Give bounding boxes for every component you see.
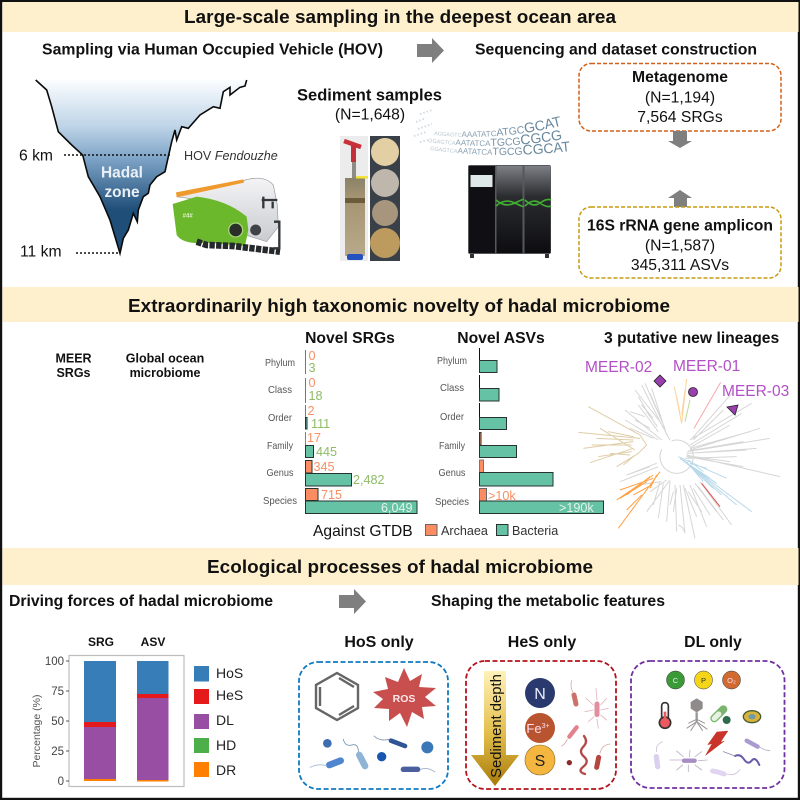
icon: oxygen [722, 671, 740, 689]
icon: lightning [705, 731, 728, 756]
marker: MEER-01 circle [688, 388, 698, 396]
subheading: driving forces: Driving forces of hadal microbiome [9, 593, 273, 610]
label: MEER SRGs: SRGs [56, 366, 91, 380]
icon: ROS burst [373, 668, 436, 727]
heading: HoS only: HoS only [344, 634, 414, 651]
icon: nitrogen: N [534, 686, 546, 703]
bar chart: novel SRGs: Genus [266, 467, 294, 479]
bar chart: novel ASVs: Genus [438, 467, 466, 479]
heading: HeS only: HeS only [508, 634, 576, 651]
arrow: driving to metabolic [339, 589, 366, 614]
illustration: submersible: #4# [183, 213, 193, 219]
arrow: metagenome down [668, 131, 692, 148]
bar chart: novel SRGs: 345 [314, 460, 335, 474]
box: HeS only [466, 661, 616, 789]
stacked bar chart: percentage [31, 635, 184, 788]
bar chart: novel SRGs: Class [268, 384, 292, 396]
label: MEER SRGs [55, 352, 92, 380]
graphic: DNA sequence reads [414, 109, 570, 156]
section heading band: ecological: Ecological processes of hadal microbiome [207, 557, 593, 578]
box: 16S rRNA amplicon: 345,311 ASVs [631, 257, 729, 274]
bar chart: novel SRGs: 111 [311, 417, 330, 431]
icon: carbon: C [673, 676, 679, 685]
stacked bar chart: percentage: SRG [88, 635, 114, 649]
icons: bacteria [562, 681, 610, 774]
bar chart: novel SRGs: 0 [308, 349, 316, 363]
legend: driving forces: HD [216, 737, 236, 753]
bar chart: novel ASVs [435, 330, 604, 515]
legend: against GTDB: Bacteria [512, 524, 558, 538]
legend: against GTDB [313, 523, 558, 540]
bar chart: novel SRGs [263, 330, 417, 515]
diagram: hadal trench: zone [104, 184, 140, 201]
box: metagenome [579, 64, 781, 131]
icon: phosphorus: P [701, 676, 706, 685]
bar chart: novel SRGs: 18 [308, 389, 323, 403]
phylogenetic tree [578, 379, 780, 538]
bar chart: novel ASVs: Novel ASVs [457, 330, 545, 347]
label: global ocean microbiome: Global ocean [126, 352, 204, 366]
icon: iron: 3+ [542, 723, 550, 730]
marker: MEER-03 triangle [727, 405, 738, 415]
diagram: hadal trench: 11 km [20, 244, 62, 260]
stacked bar chart: percentage: 50 [51, 716, 64, 728]
bar chart: novel SRGs: 2 [308, 404, 315, 418]
label: HOV Fendouzhe: HOV Fendouzhe [184, 149, 278, 163]
panel: taxonomic novelty [2, 287, 798, 540]
icon: sediment depth arrow [471, 671, 519, 786]
icon: phosphorus [694, 671, 712, 689]
bar chart: novel ASVs: Class [440, 382, 464, 394]
icon: phage [687, 698, 707, 731]
legend: driving forces: DL [216, 712, 234, 728]
bar chart: novel SRGs: 2,482 [353, 473, 385, 487]
photo: sediment core [340, 136, 368, 261]
stacked bar chart: percentage: 25 [51, 746, 64, 758]
icon: iron [525, 713, 555, 743]
bar chart: novel SRGs: 3 [308, 361, 316, 375]
icons: bacteria [310, 736, 435, 772]
arrow: sampling to sequencing [417, 38, 444, 63]
bar chart: novel SRGs: Family [267, 440, 294, 452]
bar chart: novel ASVs: Species [435, 496, 469, 508]
section heading band: ecological [2, 548, 798, 585]
icon: iron: Fe [526, 721, 542, 736]
section heading band: novelty [2, 287, 798, 322]
heading: sediment samples: Sediment samples [297, 86, 442, 104]
box: HoS only [299, 662, 448, 789]
bar chart: novel SRGs: 0 [308, 376, 316, 390]
label: MEER SRGs: MEER [55, 352, 92, 366]
diagram: hadal trench [19, 80, 247, 260]
box: metagenome: Metagenome [632, 69, 728, 86]
bar chart: novel ASVs: >10k [488, 489, 516, 503]
bar chart: novel SRGs: 445 [316, 445, 337, 459]
bar chart: novel SRGs: Phylum [265, 357, 295, 369]
bar chart: novel SRGs: 17 [307, 431, 321, 445]
legend: driving forces [194, 665, 243, 778]
heading: 3 putative new lineages: 3 putative new lineages [604, 330, 780, 347]
stacked bar chart: percentage: Percentage (%) [31, 695, 43, 767]
heading: sediment samples [297, 86, 442, 124]
diagram: hadal trench: 6 km [19, 148, 53, 164]
section heading band: sampling: Large-scale sampling in the deepest ocean area [184, 7, 616, 28]
subheading: sampling via HOV: Sampling via Human Occupied Vehicle (HOV) [42, 42, 383, 58]
icon: antibiotic pill [714, 709, 731, 724]
icon: sulfur [525, 745, 555, 775]
label: MEER-01: MEER-01 [673, 358, 740, 375]
section heading band: novelty: Extraordinarily high taxonomic novelty of hadal microbiome [128, 296, 670, 317]
box: 16S rRNA amplicon: 16S rRNA gene amplicon [587, 218, 773, 234]
icon: eukaryotic cell [743, 711, 761, 723]
label: global ocean microbiome: microbiome [130, 366, 200, 380]
panel: large-scale sampling [2, 2, 798, 279]
icon: sediment depth arrow: Sediment depth [489, 674, 505, 778]
legend: against GTDB: Against GTDB [313, 523, 413, 540]
marker: MEER-02 diamond [654, 375, 666, 387]
box: metagenome: 7,564 SRGs [637, 109, 723, 126]
photo: sediment surfaces [370, 136, 400, 261]
legend: driving forces: DR [216, 762, 236, 778]
bar chart: novel SRGs: Species [263, 495, 297, 507]
bar chart: novel ASVs: Phylum [437, 355, 467, 367]
diagram: hadal trench: Hadal [101, 164, 143, 182]
bar chart: novel SRGs: Order [268, 412, 292, 424]
heading: DL only: DL only [684, 634, 742, 651]
icon: nitrogen [525, 678, 555, 708]
section heading band: sampling [2, 2, 798, 32]
heading: sediment samples: (N=1,648) [335, 106, 405, 124]
box: metagenome: (N=1,194) [645, 90, 715, 106]
legend: driving forces: HoS [216, 665, 243, 681]
illustration: submersible [173, 178, 280, 252]
box: 16S rRNA amplicon: (N=1,587) [645, 238, 715, 254]
icons: bacteria [656, 741, 770, 775]
bar chart: novel ASVs: >190k [559, 501, 594, 515]
icon: thermometer [659, 703, 671, 728]
bar chart: novel SRGs: 6,049 [381, 501, 413, 515]
bar chart: novel ASVs: Order [440, 411, 464, 423]
stacked bar chart: percentage: 100 [45, 656, 64, 668]
stacked bar chart: percentage: 0 [58, 776, 64, 788]
graphic: DNA sequence reads: GGAGTCAAATATCATGCGCGCG [428, 130, 562, 146]
graphic: DNA sequence reads: GGAGTCAAATATCATGCGCGCAT [430, 141, 570, 156]
label: global ocean microbiome [126, 352, 204, 380]
subheading: metabolic features: Shaping the metabolic features [431, 593, 665, 610]
icon: ROS burst: ROS [393, 693, 415, 705]
illustration: sequencer [468, 165, 551, 258]
graphic: DNA sequence reads: AGGAGTCAAATATCATGCGCAT [434, 116, 560, 137]
bar chart: novel ASVs: Family [439, 440, 466, 452]
legend: driving forces: HeS [216, 687, 243, 703]
label: MEER-02: MEER-02 [585, 359, 652, 376]
icon: benzene ring [316, 673, 358, 720]
icon: sulfur: S [535, 753, 545, 770]
label: MEER-03: MEER-03 [722, 383, 789, 400]
icon: oxygen: O₂ [727, 676, 736, 685]
bar chart: novel SRGs: Novel SRGs [305, 330, 395, 347]
subheading: sequencing and dataset: Sequencing and dataset construction [475, 42, 757, 58]
icon: carbon [666, 671, 684, 689]
stacked bar chart: percentage: 75 [51, 686, 64, 698]
panel: ecological processes [2, 548, 798, 789]
bar chart: novel SRGs: 715 [321, 488, 342, 502]
box: DL only [631, 661, 784, 788]
box: 16S rRNA amplicon [579, 207, 781, 278]
arrow: amplicon up [668, 190, 692, 207]
legend: against GTDB: Archaea [441, 524, 488, 538]
stacked bar chart: percentage: ASV [141, 635, 165, 649]
